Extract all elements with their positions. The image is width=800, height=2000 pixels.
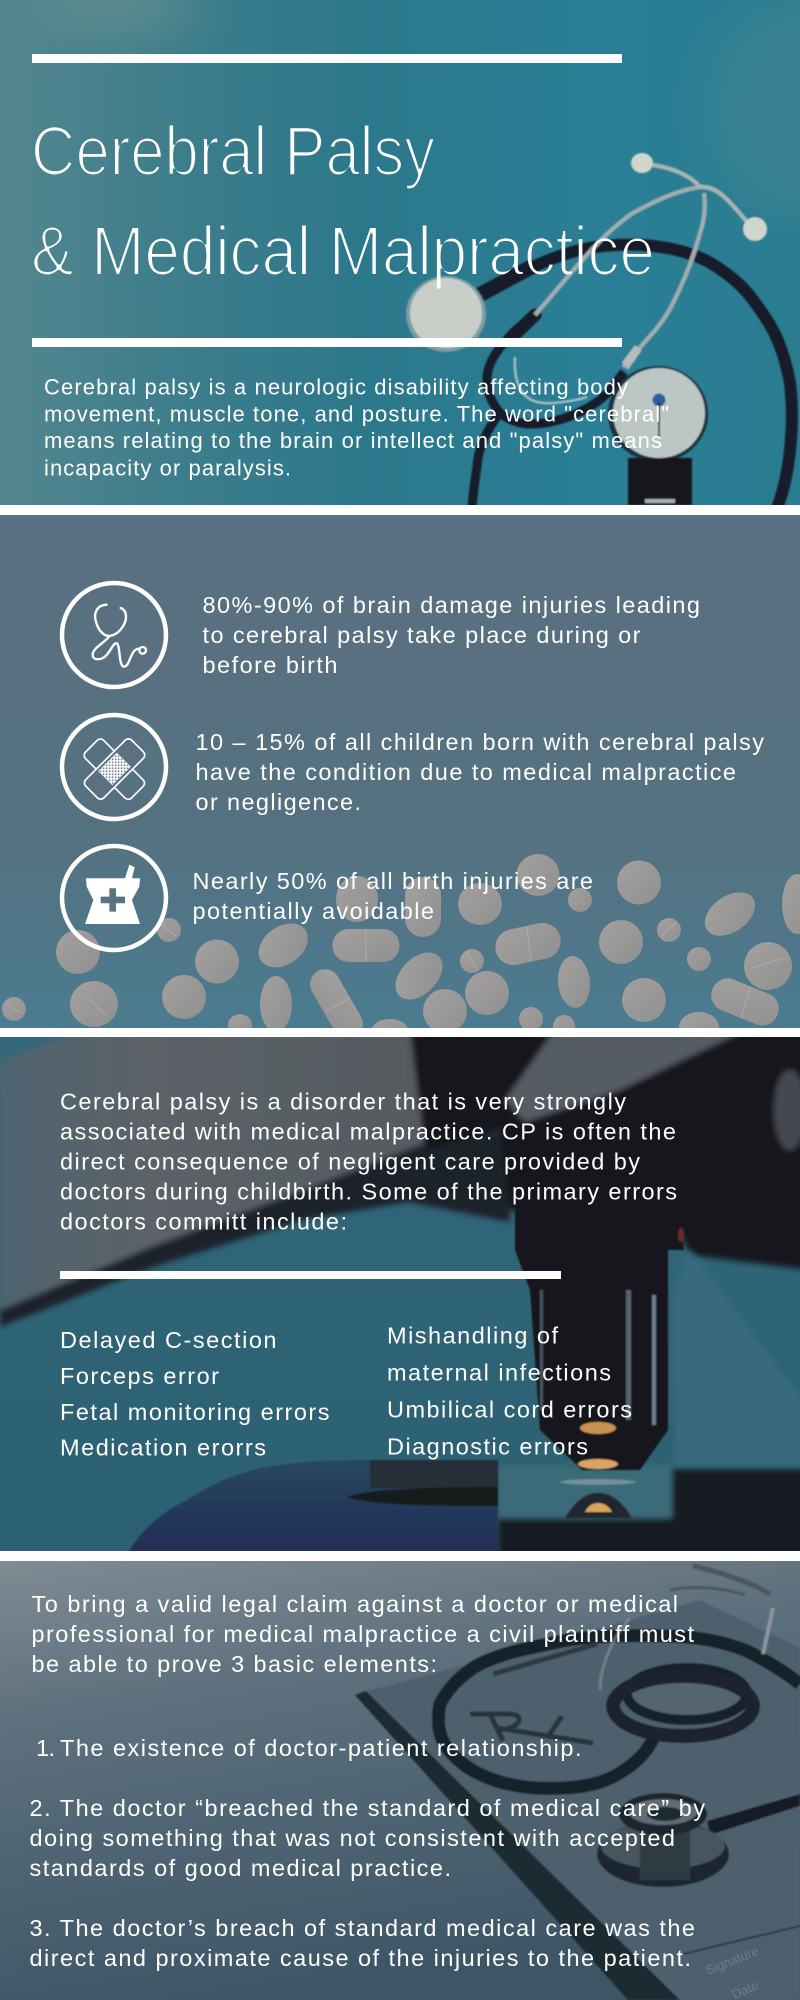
element 2: 2. The doctor “breached the standard of medical care” by (30, 1795, 705, 1821)
icon: bandage (62, 715, 166, 819)
background: teal stethoscope photo (0, 0, 800, 508)
icon: mortar and pestle (62, 846, 166, 950)
stat text: potentially avoidable (192, 898, 434, 924)
errors list: left column (60, 1327, 330, 1460)
intro text (32, 1591, 694, 1677)
element 2: standards of good medical practice. (30, 1855, 451, 1881)
panel: statistics with pills background (0, 515, 800, 1045)
background: microscope photo (0, 1030, 800, 1560)
stat text: have the condition due to medical malpractice (196, 759, 736, 785)
errors list: left column: Medication erorrs (60, 1434, 266, 1460)
stat text: or negligence. (196, 789, 361, 815)
title: Cerebral Palsy (31, 112, 435, 190)
intro text: professional for medical malpractice a civil plaintiff must (32, 1621, 694, 1647)
title (31, 112, 655, 290)
intro text: doctors during childbirth. Some of the primary errors (60, 1178, 677, 1204)
divider rule (60, 1271, 561, 1279)
element 1: The existence of doctor-patient relationship. (60, 1735, 582, 1761)
stat text: before birth (202, 652, 338, 678)
errors list: right column: Diagnostic errors (387, 1434, 588, 1460)
stat text: to cerebral palsy take place during or (202, 622, 641, 648)
intro text: To bring a valid legal claim against a doctor or medical (32, 1591, 678, 1617)
errors list: right column (387, 1322, 632, 1460)
errors list: left column: Forceps error (60, 1363, 219, 1389)
intro text: movement, muscle tone, and posture. The word "cerebral" (44, 402, 669, 426)
top rule (32, 54, 622, 63)
background: pills photo (0, 515, 800, 1045)
intro text: doctors committ include: (60, 1208, 347, 1234)
form labels on prescription (706, 1948, 758, 1998)
intro text: associated with medical malpractice. CP is often the (60, 1118, 676, 1144)
form labels on prescription: Signature (704, 1943, 761, 1978)
errors list: right column: Mishandling of (387, 1322, 558, 1348)
stat: brain damage timing (62, 583, 700, 687)
element 2: doing something that was not consistent with accepted (30, 1825, 675, 1851)
intro text: be able to prove 3 basic elements: (32, 1651, 437, 1677)
stat: avoidable injuries (62, 846, 593, 950)
background: prescription and stethoscope photo (0, 1561, 800, 2000)
panel: intro with stethoscope background (0, 0, 800, 508)
errors list: right column: Umbilical cord errors (387, 1396, 632, 1422)
intro text (60, 1088, 677, 1234)
intro text: means relating to the brain or intellect and "palsy" means (44, 428, 662, 453)
stat text: Nearly 50% of all birth injuries are (192, 868, 593, 894)
errors list: right column: maternal infections (387, 1360, 611, 1386)
stat text: 80%-90% of brain damage injuries leading (202, 592, 700, 618)
element 3 (30, 1915, 695, 1971)
element 2 (30, 1795, 705, 1881)
lower rule (32, 338, 622, 347)
intro text: Cerebral palsy is a neurologic disability affecting body (44, 374, 628, 400)
panel: common errors with microscope background (0, 1030, 800, 1560)
panel: legal elements with prescription background (0, 1561, 800, 2000)
stat: malpractice share (62, 715, 764, 819)
stat text (196, 729, 764, 815)
intro text (44, 374, 669, 480)
stat text (192, 868, 593, 924)
element 1: 1. (36, 1735, 55, 1761)
title: & Medical Malpractice (31, 212, 655, 290)
intro text: Cerebral palsy is a disorder that is very strongly (60, 1088, 626, 1114)
intro text: incapacity or paralysis. (44, 456, 291, 480)
intro text: direct consequence of negligent care provided by (60, 1148, 640, 1174)
stat text (202, 592, 700, 678)
icon: stethoscope (62, 583, 166, 687)
errors list: left column: Delayed C-section (60, 1327, 276, 1353)
stat text: 10 – 15% of all children born with cerebral palsy (196, 729, 764, 755)
element 3: direct and proximate cause of the injuries to the patient. (30, 1945, 691, 1971)
errors list: left column: Fetal monitoring errors (60, 1399, 330, 1425)
element 3: 3. The doctor’s breach of standard medical care was the (30, 1915, 695, 1941)
